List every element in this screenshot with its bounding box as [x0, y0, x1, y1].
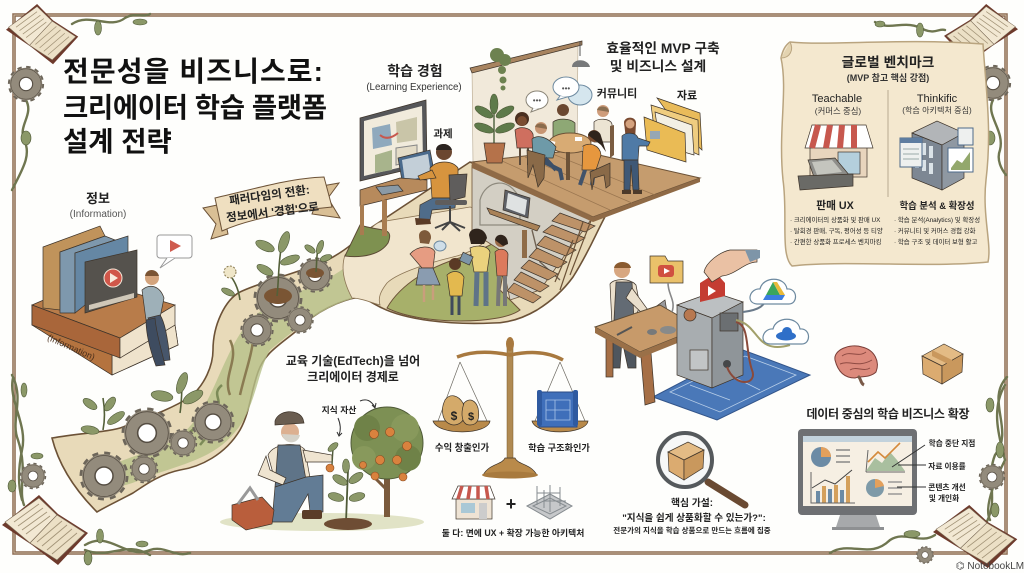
- illustration: farmer and knowledge tree: [220, 407, 424, 531]
- illustration: community table scene: [515, 77, 614, 190]
- title: [63, 56, 327, 157]
- illustration: stack of books and thinking man: (Information): [46, 332, 97, 362]
- banner: paradigm shift: 패러다임의 전환:: [228, 182, 311, 208]
- caption: both: 둘 다: 면에 UX + 확장 가능한 아키텍처: [442, 527, 584, 538]
- icon: small shop: [452, 486, 495, 519]
- illustration: community table scene: •••: [533, 96, 541, 105]
- banner: paradigm shift: 정보에서 '경험'으로: [225, 199, 320, 225]
- icon: google drive cloud: [750, 279, 796, 304]
- icon: lamp: [572, 42, 590, 67]
- title: 전문성을 비즈니스로:: [63, 56, 323, 87]
- callout: dashboard labels: 학습 중단 지점: [929, 438, 975, 448]
- heading: data-driven expansion: 데이터 중심의 학습 비즈니스 확장: [806, 406, 970, 421]
- label: information: 정보: [86, 191, 110, 206]
- column: Teachable: · 탈회경 판매, 구독, 평어성 등 티양: [790, 226, 883, 235]
- title: 설계 전략: [63, 126, 172, 157]
- label: revenue vs. structure: [435, 442, 590, 453]
- callout: dashboard labels: 및 개인화: [929, 493, 959, 503]
- label: information: [70, 191, 126, 220]
- illustration: balance scale: $: [451, 409, 458, 423]
- icon: cardboard box: [922, 344, 963, 384]
- label: knowledge asset: [322, 400, 376, 436]
- text: core hypothesis: [613, 496, 771, 535]
- heading: global benchmark: (MVP 참고 핵심 강점): [847, 72, 929, 83]
- illustration: community table scene: •••: [562, 84, 570, 93]
- label: assignment: 과제: [433, 127, 453, 140]
- heading: efficient MVP: [606, 41, 720, 74]
- callout: dashboard labels: [892, 438, 975, 503]
- illustration: balance scale: $: [468, 411, 474, 423]
- label: knowledge asset: 지식 자산: [322, 404, 356, 415]
- column: Teachable: [790, 93, 883, 246]
- text: core hypothesis: 전문가의 지식을 학습 상품으로 만드는 흐름에 집중: [613, 525, 771, 535]
- label: learning experience: 학습 경험: [387, 63, 443, 79]
- column: Teachable: 판매 UX: [816, 199, 855, 212]
- heading: edtech to creator economy: 교육 기술(EdTech)을 넘어: [286, 353, 420, 368]
- column: Thinkific: Thinkific: [917, 93, 958, 105]
- cream walkway: [343, 207, 493, 305]
- column: Teachable: · 간편한 상품화 프로세스 벤치마킹: [790, 237, 882, 246]
- icon: corner book bottom right: [933, 505, 1017, 568]
- title: 크리에이터 학습 플랫폼: [63, 92, 327, 123]
- label: revenue vs. structure: 학습 구조화인가: [528, 442, 590, 453]
- chart: monitor dashboard: [798, 429, 917, 530]
- column: Thinkific: 학습 분석 & 확장성: [900, 200, 974, 211]
- icon: structural foundation: [527, 485, 572, 519]
- column: Teachable: · 크리에이터의 상품화 및 판매 UX: [790, 215, 881, 224]
- illustration: stack of books and thinking man: [32, 226, 192, 375]
- icon: corner book top left: [6, 4, 78, 64]
- heading: efficient MVP: 및 비즈니스 설계: [610, 59, 706, 74]
- gears on path: [82, 454, 126, 498]
- illustration: processing machine: [677, 250, 790, 388]
- column: Thinkific: · 학습 분석(Analytics) 및 확장성: [894, 215, 980, 224]
- illustration: maker at desk: [595, 262, 810, 420]
- icon: plus: +: [506, 494, 516, 514]
- column: Teachable: (커머스 중심): [815, 106, 861, 116]
- illustration: desk with tablet and learner: [360, 100, 467, 236]
- icon: brain: [835, 346, 877, 385]
- text: core hypothesis: 핵심 가설:: [671, 496, 713, 509]
- column: Teachable: Teachable: [812, 93, 862, 105]
- icon: corner book bottom left: [2, 495, 88, 565]
- illustration: people on walkway: [410, 229, 508, 315]
- heading: edtech to creator economy: [286, 353, 420, 384]
- illustration: under-floor room and stairs: [472, 165, 595, 303]
- illustration: wooden loft floor and wall: [470, 41, 700, 222]
- heading: efficient MVP: 효율적인 MVP 구축: [606, 41, 720, 56]
- illustration: woman at folder: [622, 118, 650, 194]
- column: Thinkific: (학습 아키텍처 중심): [902, 105, 972, 115]
- callout: dashboard labels: 콘텐츠 개선: [928, 482, 966, 492]
- cave ground: [387, 235, 520, 321]
- callout: dashboard labels: 자료 이용률: [928, 461, 966, 471]
- label: learning experience: (Learning Experience): [366, 82, 462, 93]
- column: Thinkific: · 커뮤니티 및 커머스 경험 강화: [894, 226, 976, 235]
- heading: global benchmark: [842, 55, 935, 83]
- icon: blue cloud: [763, 319, 809, 344]
- label: revenue vs. structure: 수익 창출인가: [435, 442, 490, 453]
- text: core hypothesis: "지식을 쉽게 상품화할 수 있는가?":: [622, 512, 766, 524]
- icon: magnifier: [658, 433, 745, 505]
- banner: paradigm shift: [203, 177, 340, 239]
- icon: video folder: [650, 256, 683, 312]
- watermark: NotebookLM: ⌬ NotebookLM: [956, 561, 1024, 572]
- column: Thinkific: [894, 93, 980, 246]
- label: information: (Information): [70, 209, 126, 220]
- heading: edtech to creator economy: 크리에이터 경제로: [307, 369, 399, 384]
- illustration: winding path and hill: [52, 162, 607, 512]
- panel: global benchmark scroll: [781, 42, 989, 266]
- icon: plants on path: [80, 230, 333, 436]
- illustration: balance scale: [433, 337, 588, 478]
- column: Thinkific: · 학습 구조 및 데이터 보형 활고: [894, 237, 977, 246]
- icon: hanging plant: [490, 48, 511, 90]
- label: learning experience: [366, 63, 462, 93]
- label: community: 커뮤니티: [597, 87, 637, 100]
- icon: potted plant: [473, 94, 516, 163]
- heading: global benchmark: 글로벌 벤치마크: [842, 55, 935, 70]
- icon: folders: [644, 98, 702, 162]
- icon: corner book top right: [944, 4, 1018, 63]
- label: materials: 자료: [677, 89, 697, 102]
